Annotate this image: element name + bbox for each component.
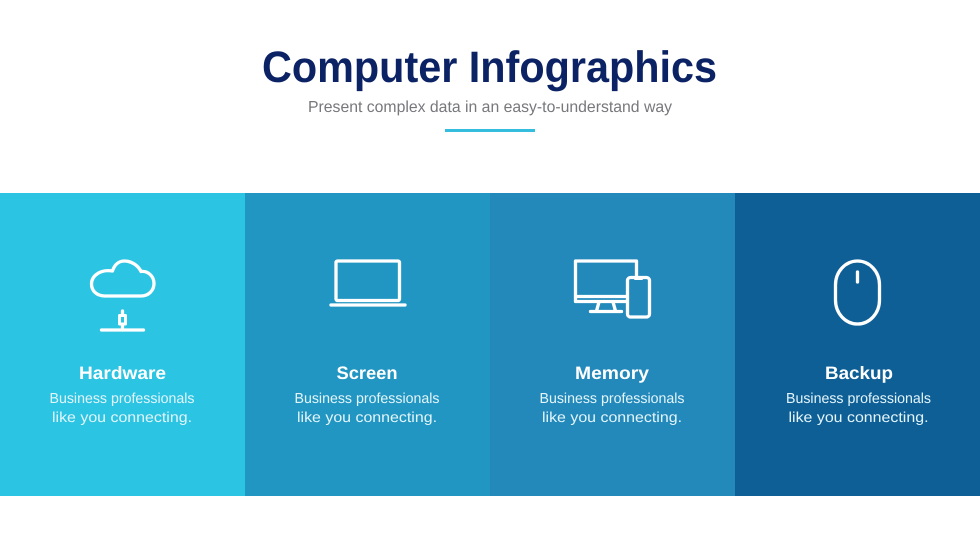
heading: screen: Screen: [336, 363, 398, 383]
text: backup description: like you connecting.: [788, 410, 928, 426]
text: memory description: [540, 391, 684, 426]
text: hardware description: like you connecting.: [52, 410, 192, 426]
text: memory description: like you connecting.: [542, 410, 682, 426]
heading: memory: Memory: [575, 363, 649, 383]
text: hardware description: [50, 391, 194, 426]
text: hardware description: Business professionals: [50, 391, 194, 407]
panel: hardware: [0, 193, 245, 496]
subtitle: Present complex data in an easy-to-understand way: [308, 99, 672, 116]
heading: hardware: Hardware: [79, 363, 166, 383]
title: Computer Infographics: [262, 43, 717, 92]
text: backup description: Business professionals: [786, 391, 931, 407]
icon: mouse: [836, 261, 880, 324]
icon: desktop and phone: [576, 261, 650, 317]
text: backup description: [786, 391, 931, 426]
icon: laptop: [331, 261, 405, 305]
text: screen description: [294, 391, 440, 426]
panel: memory: [490, 193, 735, 496]
text: memory description: Business professionals: [540, 391, 684, 407]
panel: backup: [735, 193, 980, 496]
icon: cloud network: [92, 261, 154, 330]
text: screen description: like you connecting.: [297, 410, 437, 426]
panel: screen: [245, 193, 490, 496]
heading: backup: Backup: [825, 363, 893, 383]
text: screen description: Business professionals: [294, 391, 440, 407]
title accent bar: [445, 129, 535, 132]
